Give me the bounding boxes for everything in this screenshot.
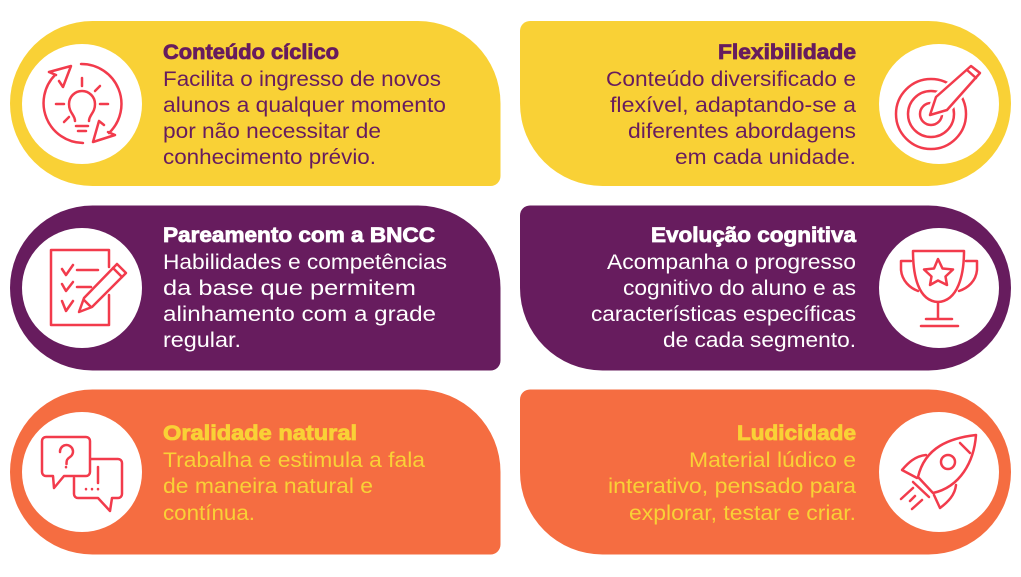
icon: checklist with pencil [22, 228, 142, 348]
panel background yellow [10, 21, 500, 186]
text: Conteúdo cíclico: alunos a qualquer momento [163, 94, 446, 117]
text: Flexibilidade: flexível, adaptando-se a [610, 94, 856, 117]
text: Flexibilidade: em cada unidade. [675, 146, 856, 169]
text: Pareamento com a BNCC: regular. [163, 329, 241, 352]
text: Ludicidade: Material lúdico e [689, 449, 856, 472]
text: Ludicidade [608, 422, 856, 525]
text: Conteúdo cíclico: conhecimento prévio. [163, 146, 376, 169]
text: Evolução cognitiva [591, 224, 856, 352]
text: Pareamento com a BNCC: Pareamento com a BNCC [163, 224, 435, 247]
icon: cycle with light bulb [22, 44, 142, 164]
panel: Conteúdo cíclico [10, 21, 500, 186]
text: Pareamento com a BNCC [163, 224, 447, 352]
text: Evolução cognitiva: Acompanha o progresso [607, 251, 856, 274]
text: Evolução cognitiva: características específicas [591, 303, 856, 326]
text: Flexibilidade: diferentes abordagens [628, 120, 856, 143]
panel: Flexibilidade [520, 21, 1011, 186]
text: Oralidade natural: de maneira natural e [163, 475, 373, 498]
panel background yellow [520, 21, 1011, 186]
text: Ludicidade: interativo, pensado para [608, 475, 856, 498]
text: Conteúdo cíclico: Conteúdo cíclico [163, 41, 339, 64]
icon: rocket [879, 412, 999, 532]
icon: target with pencil [879, 44, 999, 164]
panel background purple [520, 206, 1011, 370]
panel background orange [520, 390, 1011, 554]
panel: Pareamento com a BNCC [10, 206, 500, 370]
text: Flexibilidade: Flexibilidade [718, 41, 856, 64]
panel: Ludicidade [520, 390, 1011, 554]
panel: Oralidade natural [10, 390, 500, 554]
icon: speech bubbles [22, 412, 142, 532]
text: Flexibilidade: Conteúdo diversificado e [606, 68, 856, 91]
text: Conteúdo cíclico: por não necessitar de [163, 120, 381, 143]
icon: trophy with star [879, 228, 999, 348]
panel background orange [10, 390, 500, 554]
text: Evolução cognitiva: Evolução cognitiva [651, 224, 856, 247]
text: Oralidade natural: Trabalha e estimula a fala [163, 449, 425, 472]
text: Pareamento com a BNCC: alinhamento com a grade [163, 303, 436, 326]
text: Conteúdo cíclico [163, 41, 446, 169]
panel: Evolução cognitiva [520, 206, 1011, 370]
text: Ludicidade: Ludicidade [737, 422, 856, 445]
text: Pareamento com a BNCC: Habilidades e competências [163, 251, 447, 274]
text: Oralidade natural: Oralidade natural [163, 422, 357, 445]
text: Ludicidade: explorar, testar e criar. [629, 502, 856, 525]
text: Evolução cognitiva: de cada segmento. [663, 329, 856, 352]
text: Oralidade natural [163, 422, 425, 525]
panel background purple [10, 206, 500, 370]
text: Oralidade natural: contínua. [163, 502, 255, 525]
text: Flexibilidade [606, 41, 856, 169]
text: Conteúdo cíclico: Facilita o ingresso de novos [163, 68, 441, 91]
text: Evolução cognitiva: cognitivo do aluno e as [623, 277, 856, 300]
text: Pareamento com a BNCC: da base que permitem [163, 277, 416, 300]
